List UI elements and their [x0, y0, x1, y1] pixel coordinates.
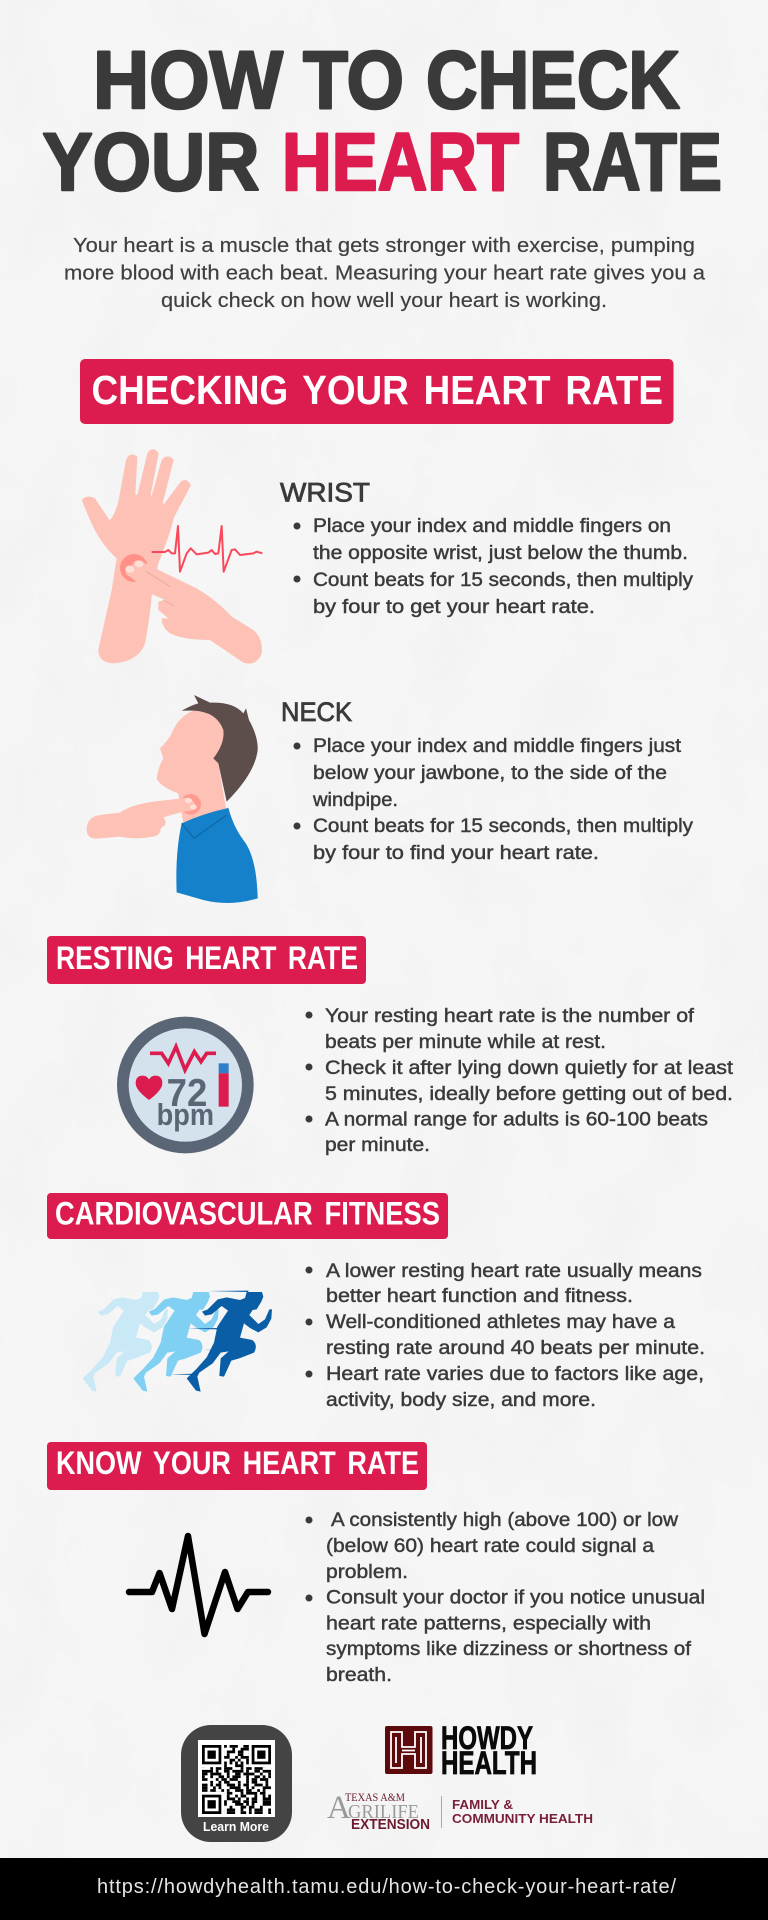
resting heart rate text: 5 minutes, ideally before getting out of bed.: [325, 1083, 733, 1105]
Texas A&M AgriLife Extension logo: GRILIFE: [348, 1801, 419, 1823]
title: YOUR: [42, 117, 260, 208]
know your heart rate text: symptoms like dizziness or shortness of: [326, 1638, 692, 1660]
title: HEART: [282, 117, 519, 208]
neck section text: Count beats for 15 seconds, then multiply: [313, 815, 693, 837]
Howdy Health logo: [385, 1720, 537, 1781]
wrist section text: the opposite wrist, just below the thumb.: [313, 542, 688, 564]
icon: three runners: [83, 1291, 272, 1392]
icon: wrist pulse hand: [82, 449, 262, 664]
wrist section text: Count beats for 15 seconds, then multiply: [313, 569, 693, 591]
title: HOW: [93, 35, 284, 126]
QR code modules: [202, 1745, 271, 1814]
neck section text: Place your index and middle fingers just: [313, 735, 682, 757]
icon: heart rate monitor 72 bpm: bpm: [157, 1098, 214, 1132]
neck section text: below your jawbone, to the side of the: [313, 762, 667, 784]
cardiovascular fitness text: activity, body size, and more.: [326, 1389, 596, 1411]
resting heart rate text: beats per minute while at rest.: [325, 1031, 606, 1053]
resting heart rate text: per minute.: [325, 1134, 430, 1156]
heading banner: resting heart rate: [47, 936, 366, 984]
Texas A&M AgriLife Extension logo: [327, 1790, 430, 1833]
neck section text: by four to find your heart rate.: [313, 842, 599, 864]
know your heart rate text: Consult your doctor if you notice unusual: [326, 1586, 705, 1608]
heading banner: resting heart rate: RESTING HEART RATE: [56, 940, 358, 976]
heading banner: checking your heart rate: CHECKING YOUR HEART RATE: [92, 367, 663, 413]
know your heart rate text: (below 60) heart rate could signal a: [326, 1535, 654, 1557]
neck section text: windpipe.: [312, 789, 398, 811]
icon: neck pulse person: [87, 695, 258, 903]
title: TO: [303, 35, 404, 126]
icon: black pulse line: [129, 1536, 268, 1634]
heading banner: know your heart rate: [47, 1442, 427, 1490]
QR code badge: Learn More: [203, 1820, 269, 1834]
cardiovascular fitness text: [306, 1260, 705, 1411]
title: RATE: [543, 117, 722, 208]
resting heart rate text: [306, 1005, 734, 1156]
intro text: [64, 234, 706, 312]
know your heart rate text: breath.: [326, 1664, 392, 1686]
neck section text: NECK: [281, 697, 352, 727]
cardiovascular fitness text: Heart rate varies due to factors like age,: [326, 1363, 704, 1385]
intro text: more blood with each beat. Measuring your heart rate gives you a: [64, 262, 706, 284]
heading banner: cardiovascular fitness: CARDIOVASCULAR FITNESS: [55, 1196, 440, 1232]
icon: heart rate monitor 72 bpm: [117, 1017, 254, 1153]
Texas A&M AgriLife Extension logo: A: [327, 1790, 351, 1826]
Texas A&M AgriLife Extension logo: TEXAS A&M: [345, 1792, 405, 1804]
Howdy Health logo: HOWDY: [441, 1720, 533, 1756]
Family and Community Health logo text: COMMUNITY HEALTH: [452, 1811, 593, 1826]
know your heart rate text: heart rate patterns, especially with: [326, 1612, 651, 1634]
title: CHECK: [426, 35, 680, 126]
resting heart rate text: A normal range for adults is 60-100 beats: [325, 1108, 708, 1130]
wrist section text: WRIST: [280, 478, 370, 508]
heading banner: checking your heart rate: [80, 359, 674, 424]
title: [42, 35, 722, 208]
wrist section text: Place your index and middle fingers on: [313, 515, 671, 537]
QR code badge: [181, 1725, 292, 1842]
wrist section text: by four to get your heart rate.: [313, 596, 595, 618]
Family and Community Health logo text: [441, 1796, 593, 1828]
footer URL bar: [0, 1858, 768, 1920]
cardiovascular fitness text: resting rate around 40 beats per minute.: [326, 1337, 705, 1359]
footer URL bar: https://howdyhealth.tamu.edu/how-to-check-your-heart-rate/: [97, 1876, 676, 1898]
wrist section text: [280, 478, 693, 618]
resting heart rate text: Check it after lying down quietly for at least: [325, 1057, 734, 1079]
heading banner: know your heart rate: KNOW YOUR HEART RATE: [56, 1445, 419, 1481]
know your heart rate text: problem.: [326, 1561, 408, 1583]
heading banner: cardiovascular fitness: [47, 1193, 448, 1239]
icon: heart rate monitor 72 bpm: 72: [167, 1071, 207, 1115]
Family and Community Health logo text: FAMILY &: [452, 1797, 513, 1812]
Texas A&M AgriLife Extension logo: EXTENSION: [351, 1817, 430, 1833]
cardiovascular fitness text: better heart function and fitness.: [326, 1285, 633, 1307]
neck section text: [281, 697, 693, 864]
intro text: quick check on how well your heart is working.: [161, 289, 607, 312]
cardiovascular fitness text: A lower resting heart rate usually means: [326, 1260, 702, 1282]
know your heart rate text: [306, 1509, 705, 1686]
intro text: Your heart is a muscle that gets stronger with exercise, pumping: [73, 234, 695, 257]
cardiovascular fitness text: Well-conditioned athletes may have a: [326, 1311, 675, 1333]
resting heart rate text: Your resting heart rate is the number of: [325, 1005, 695, 1027]
Howdy Health logo: HEALTH: [441, 1745, 537, 1781]
know your heart rate text: A consistently high (above 100) or low: [331, 1509, 679, 1531]
